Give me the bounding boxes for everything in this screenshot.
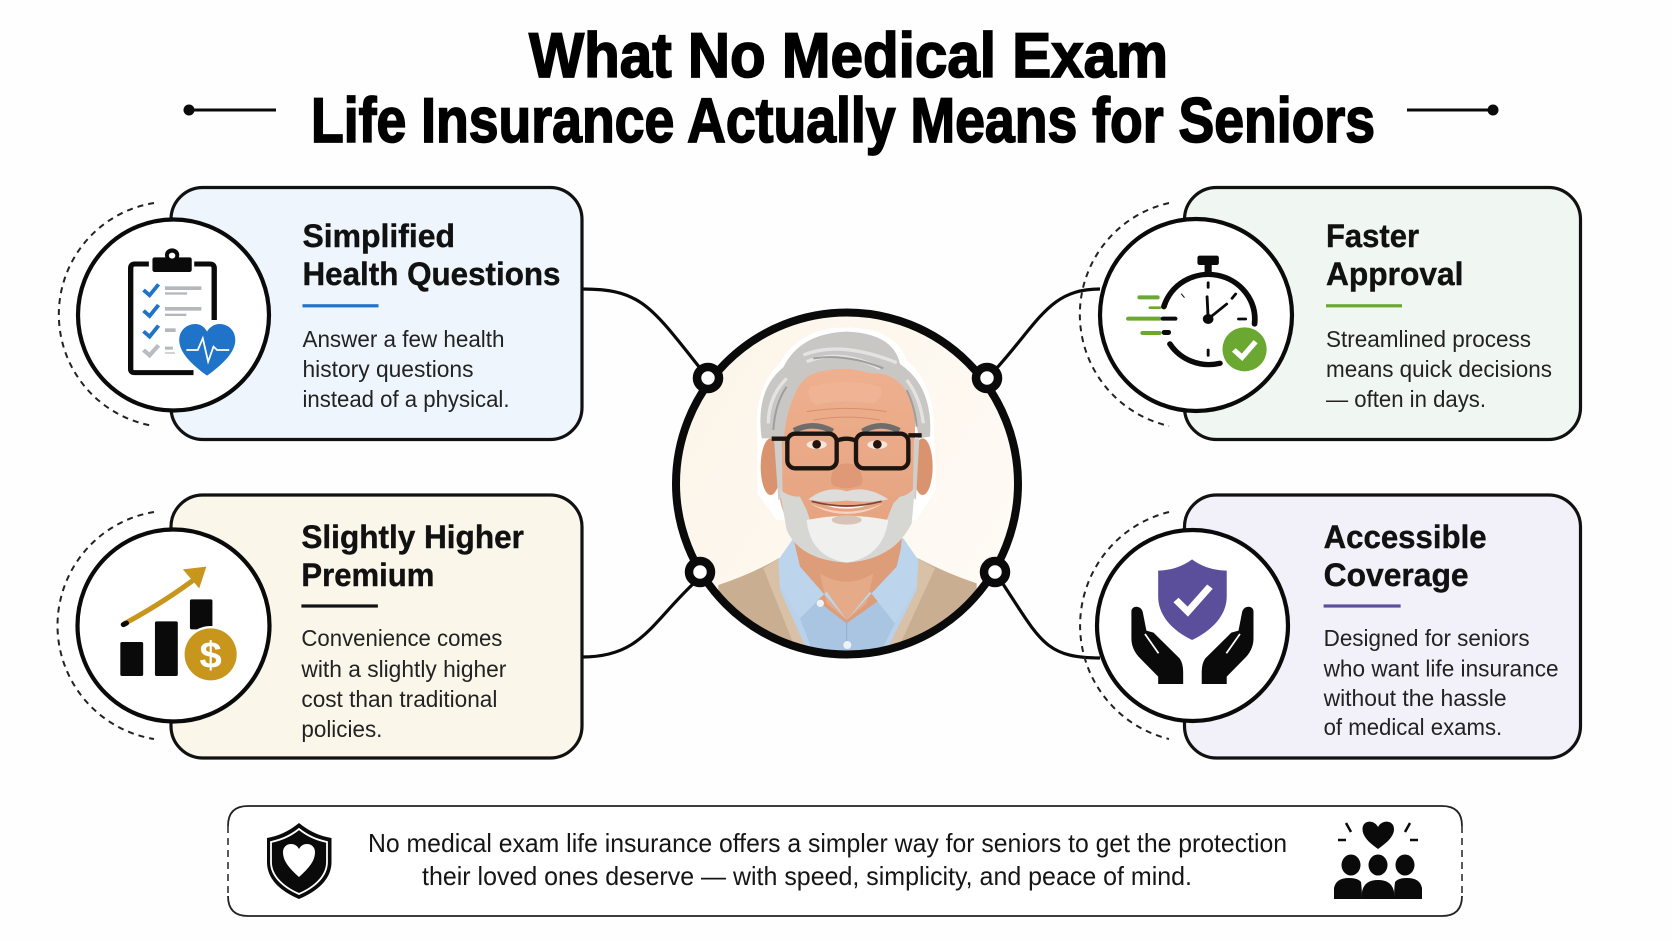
heading: faster approval: Faster	[1326, 218, 1419, 254]
icon: shield with heart	[267, 823, 332, 899]
icon: rising bars with coin: $	[200, 635, 222, 676]
description: slightly higher premium	[300, 625, 507, 742]
heading: faster approval	[1326, 218, 1464, 292]
connector lines	[582, 289, 1100, 658]
banner text	[368, 828, 1287, 891]
heading: accessible coverage: Coverage	[1324, 557, 1469, 593]
heading: slightly higher premium: Premium	[301, 557, 434, 593]
title decoration: left line	[184, 104, 276, 116]
description: accessible coverage: of medical exams.	[1324, 714, 1502, 740]
description: accessible coverage: without the hassle	[1323, 685, 1507, 711]
heading: simplified health questions: Simplified	[302, 218, 455, 254]
description: faster approval: — often in days.	[1326, 386, 1486, 412]
callout banner	[228, 806, 1462, 916]
title decoration: right line	[1407, 104, 1498, 116]
title: Life Insurance Actually Means for Seniors	[311, 86, 1375, 156]
description: slightly higher premium: cost than traditional	[301, 686, 497, 712]
description: accessible coverage: who want life insurance	[1323, 656, 1559, 682]
panel: accessible coverage	[1184, 495, 1580, 758]
icon: family with heart	[1334, 822, 1422, 899]
description: simplified health questions	[302, 326, 510, 412]
description: slightly higher premium: Convenience comes	[301, 625, 502, 651]
banner text: their loved ones deserve — with speed, simplicity, and peace of mind.	[422, 861, 1192, 891]
banner text: No medical exam life insurance offers a simpler way for seniors to get the protection	[368, 828, 1287, 858]
portrait: smiling senior man	[673, 310, 1023, 660]
description: faster approval: means quick decisions	[1326, 356, 1552, 382]
icon: clipboard with heart	[59, 203, 269, 426]
connector nodes	[689, 367, 1006, 583]
icon: hands holding shield	[1080, 512, 1288, 739]
description: simplified health questions: instead of a physical.	[302, 386, 510, 412]
heading: faster approval: Approval	[1326, 256, 1464, 292]
description: faster approval	[1326, 326, 1552, 412]
description: accessible coverage	[1323, 625, 1559, 740]
heading: simplified health questions	[302, 218, 560, 292]
panel: slightly higher premium	[171, 495, 582, 758]
panel: simplified health questions	[171, 188, 582, 440]
title	[311, 21, 1375, 156]
description: simplified health questions: history questions	[302, 356, 474, 382]
heading: accessible coverage: Accessible	[1324, 519, 1487, 555]
title: What No Medical Exam	[529, 21, 1168, 91]
icon: rising bars with coin	[58, 512, 269, 739]
description: accessible coverage: Designed for seniors	[1324, 625, 1530, 651]
heading: slightly higher premium: Slightly Higher	[301, 519, 524, 555]
description: slightly higher premium: policies.	[301, 716, 382, 742]
description: slightly higher premium: with a slightly higher	[300, 656, 507, 682]
description: simplified health questions: Answer a few health	[302, 326, 504, 352]
description: faster approval: Streamlined process	[1326, 326, 1531, 352]
heading: simplified health questions: Health Questions	[302, 256, 560, 292]
heading: slightly higher premium	[301, 519, 524, 593]
icon: stopwatch with check	[1080, 203, 1292, 426]
heading: accessible coverage	[1324, 519, 1487, 593]
panel: faster approval	[1184, 188, 1580, 440]
